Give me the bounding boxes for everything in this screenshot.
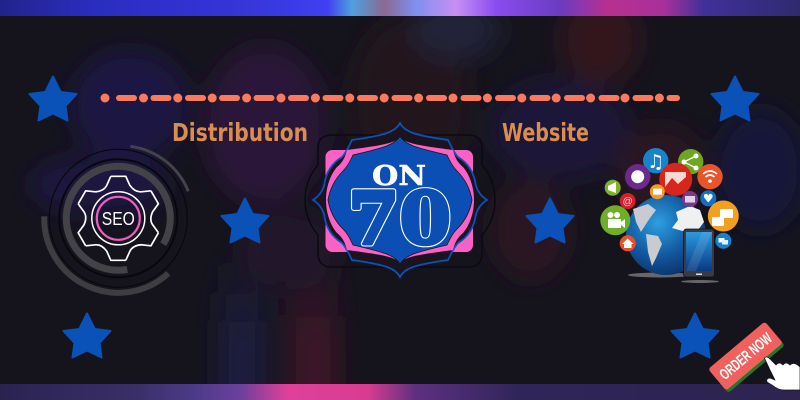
star: top left bbox=[30, 76, 76, 120]
hand cursor bbox=[764, 357, 800, 390]
gear outline bbox=[66, 169, 171, 268]
pink backing tabs bbox=[326, 150, 473, 252]
bubble: mail bbox=[650, 184, 665, 199]
icon: SEO gear with rings bbox=[44, 146, 188, 293]
bubble: music: ♫ bbox=[647, 151, 664, 173]
star: bottom right bbox=[672, 314, 718, 358]
bubble: small blue bbox=[715, 233, 731, 249]
center badge: ON 70 bbox=[305, 123, 495, 277]
bubble: share bbox=[678, 149, 703, 174]
blue pointed outline bbox=[313, 123, 487, 277]
globe bbox=[626, 195, 706, 275]
bubble: video bbox=[600, 205, 630, 235]
70 outlined text: 70 bbox=[348, 176, 451, 260]
order now button with hand cursor bbox=[708, 321, 800, 393]
shadow base bbox=[628, 272, 692, 278]
black plaque outline bbox=[305, 135, 495, 267]
bubble: purple mail bbox=[682, 191, 698, 207]
bottom light band bbox=[0, 384, 800, 400]
bubble: chat bbox=[708, 200, 739, 232]
bubble: at sign: @ bbox=[623, 196, 633, 208]
star: middle left bbox=[222, 198, 268, 242]
star: middle right bbox=[526, 198, 574, 242]
70 outlined text: 70 bbox=[348, 176, 451, 260]
star: bottom left bbox=[64, 314, 110, 358]
bubble: picture bbox=[659, 163, 692, 196]
tablet bbox=[684, 229, 714, 277]
bubble: wifi bbox=[697, 164, 723, 189]
heading: Website: Website bbox=[502, 118, 589, 147]
heading: Distribution: Distribution bbox=[172, 118, 308, 147]
star: top right bbox=[712, 76, 758, 120]
ON text: ON bbox=[372, 161, 426, 192]
SEO label: SEO bbox=[102, 209, 135, 229]
bubble: purple globe bbox=[625, 164, 650, 189]
bubble: megaphone bbox=[605, 180, 621, 196]
pink ribbon bbox=[326, 137, 474, 263]
blue centre bbox=[328, 136, 472, 264]
top light band bbox=[0, 0, 800, 16]
bubble: home bbox=[620, 235, 636, 251]
dotted dash divider bbox=[100, 94, 680, 102]
icon: globe with app bubbles bbox=[600, 148, 739, 283]
bubble: heart: ♥ bbox=[703, 192, 714, 206]
button 3d edge bbox=[710, 324, 785, 393]
